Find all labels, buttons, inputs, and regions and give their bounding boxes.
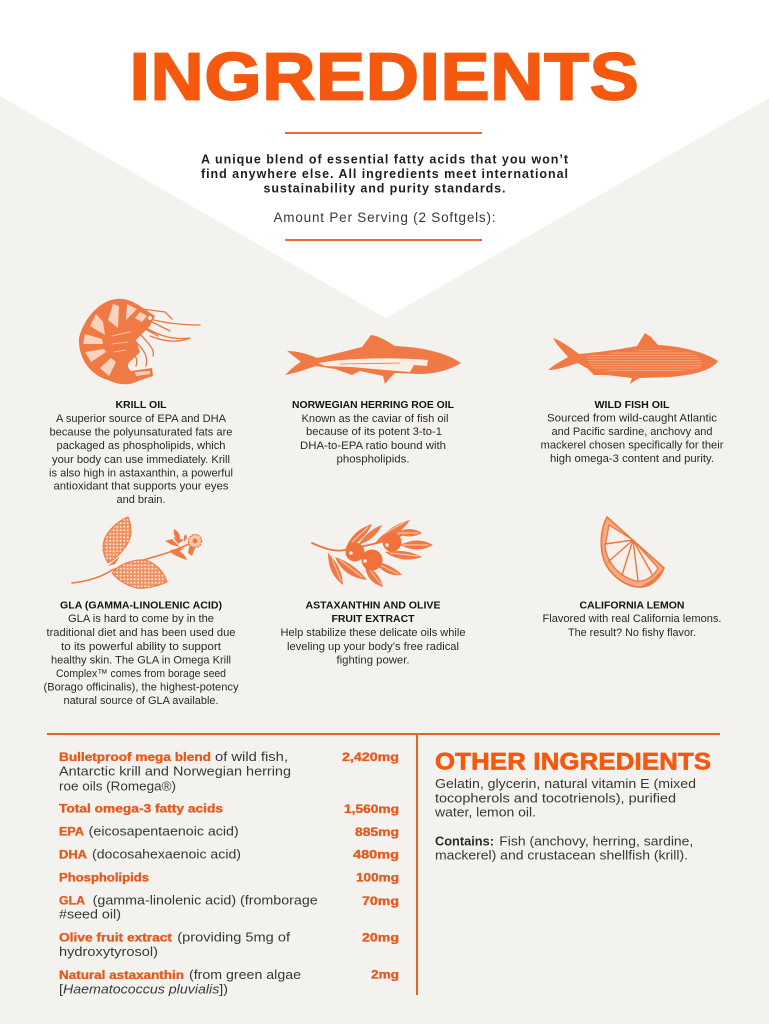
panel: gla [44,517,239,707]
row: natural astaxanthin: [Haematococcus pluvialis ]) [59,982,228,996]
table center rule [416,734,418,995]
description: astaxanthin: leveling up your body’s free radical [287,641,459,653]
icon: lemon wedge [601,517,664,587]
description: wild fish oil: and Pacific sardine, anchovy and [552,426,712,438]
heading: astaxanthin: ASTAXANTHIN AND OLIVE [306,600,440,612]
row: natural astaxanthin: (from green algae [189,968,301,982]
description: gla: Complex™ comes from borage seed [56,668,226,680]
row: phospholipids: Phospholipids [59,870,149,884]
description: krill oil: and brain. [116,494,166,506]
icon: krill [79,299,200,384]
row: gla: 70mg [362,894,399,908]
row: phospholipids [59,870,399,884]
description: krill oil: A superior source of EPA and DHA [56,413,227,425]
description: california lemon: The result? No fishy flavor. [568,627,696,639]
intro text: find anywhere else. All ingredients meet international [201,167,568,181]
row: dha: DHA [59,848,87,862]
panel: norwegian herring roe oil [285,335,461,466]
icon: herring [285,335,461,384]
description: wild fish oil: mackerel chosen specifically for their [540,440,724,452]
allergen note: mackerel) and crustacean shellfish (krill). [435,848,688,862]
allergen note: Contains: [435,834,494,848]
description: gla: traditional diet and has been used due [46,627,236,639]
row: bulletproof mega blend: Bulletproof mega blend [59,750,211,764]
heading: california lemon: CALIFORNIA LEMON [580,600,684,612]
heading: astaxanthin [306,600,440,625]
row: gla: GLA [59,894,85,908]
row: olive fruit extract: Olive fruit extract [59,930,172,944]
other ingredients list: tocopherols and tocotrienols), purified [435,792,676,806]
description: astaxanthin: Help stabilize these delicate oils while [280,627,466,639]
description: astaxanthin [280,627,466,666]
row: bulletproof mega blend: of wild fish, [215,750,288,764]
row: bulletproof mega blend: roe oils (Romega®) [59,780,176,794]
description: gla: (Borago officinalis), the highest-potency [44,682,239,694]
description: california lemon: Flavored with real California lemons. [542,613,722,625]
row: total omega-3: Total omega-3 fatty acids [59,802,223,816]
row: gla: #seed oil) [59,908,121,922]
panel: california lemon [542,517,722,639]
description: herring: DHA-to-EPA ratio bound with [300,440,446,452]
row: gla [59,894,399,922]
panel: wild fish oil [540,333,724,465]
other ingredients list [434,777,696,820]
description: wild fish oil [540,412,724,465]
top divider [285,132,482,134]
description: california lemon [542,613,722,639]
description: herring: because of its potent 3-to-1 [306,426,442,438]
row: olive fruit extract [59,930,399,959]
description: herring: Known as the caviar of fish oil [302,413,448,425]
row: bulletproof mega blend: Antarctic krill and Norwegian herring [59,764,291,778]
row: bulletproof mega blend: 2,420mg [342,750,399,764]
row: natural astaxanthin [59,968,399,996]
row: total omega-3: 1,560mg [344,802,399,816]
row: dha: 480mg [353,848,399,862]
panel: supplement amounts [59,750,399,996]
description: gla: GLA is hard to come by in the [68,613,214,625]
allergen note: Fish (anchovy, herring, sardine, [499,834,693,848]
description: herring [300,413,448,466]
description: wild fish oil: high omega-3 content and purity. [550,453,714,465]
description: herring: phospholipids. [336,454,410,466]
other ingredients list: Gelatin, glycerin, natural vitamin E (mixed [435,777,696,791]
panel: other ingredients [434,749,711,862]
other ingredients list: water, lemon oil. [434,806,536,820]
icon: borage plant [72,517,202,588]
row: epa: (eicosapentaenoic acid) [89,824,239,838]
description: gla [44,613,239,707]
heading: wild fish oil: WILD FISH OIL [594,399,670,411]
intro text: A unique blend of essential fatty acids that you won’t [201,152,569,166]
description: wild fish oil: Sourced from wild-caught Atlantic [547,412,718,424]
bottom header divider [285,239,482,241]
description: krill oil: is also high in astaxanthin, a powerful [49,468,233,480]
serving label: Amount Per Serving (2 Softgels): [274,210,496,225]
heading: gla: GLA (GAMMA-LINOLENIC ACID) [60,600,222,612]
description: krill oil: packaged as phospholipids, which [56,440,226,452]
heading: astaxanthin: FRUIT EXTRACT [332,613,415,625]
description: gla: to its powerful ability to support [61,641,221,653]
icon: olive branch [312,520,433,587]
heading: krill oil: KRILL OIL [116,399,167,411]
row: olive fruit extract: 20mg [362,930,399,944]
row: olive fruit extract: (providing 5mg of [177,930,291,944]
description: krill oil [49,413,233,506]
icon: wild fish [548,333,718,384]
row: gla: (gamma-linolenic acid) (fromborage [93,894,318,908]
heading: herring: NORWEGIAN HERRING ROE OIL [292,399,455,411]
white chevron header background [0,0,769,318]
row: total omega-3 [59,802,399,816]
row: natural astaxanthin: 2mg [371,968,399,982]
description: gla: natural source of GLA available. [64,695,218,707]
row: epa [59,824,399,839]
intro text [201,152,569,196]
row: epa: 885mg [355,825,399,839]
panel: astaxanthin and olive fruit extract [280,520,466,666]
description: krill oil: your body can use immediately. Krill [52,454,230,466]
allergen note [435,834,693,862]
row: olive fruit extract: hydroxytyrosol) [59,945,158,959]
row: epa: EPA [59,824,84,838]
title: INGREDIENTS [130,39,639,114]
description: gla: healthy skin. The GLA in Omega Krill [51,654,231,666]
description: astaxanthin: fighting power. [336,654,410,666]
description: krill oil: antioxidant that supports your eyes [54,480,229,492]
row: bulletproof mega blend [59,750,399,794]
panel: krill oil [49,299,233,506]
intro text: sustainability and purity standards. [264,182,506,196]
heading: other ingredients: OTHER INGREDIENTS [435,749,711,775]
row: dha [59,848,399,862]
row: natural astaxanthin: Natural astaxanthin [59,968,184,982]
table top rule [47,733,720,735]
description: krill oil: because the polyunsaturated fats are [50,426,232,438]
row: dha: (docosahexaenoic acid) [92,848,241,862]
row: phospholipids: 100mg [356,870,399,884]
